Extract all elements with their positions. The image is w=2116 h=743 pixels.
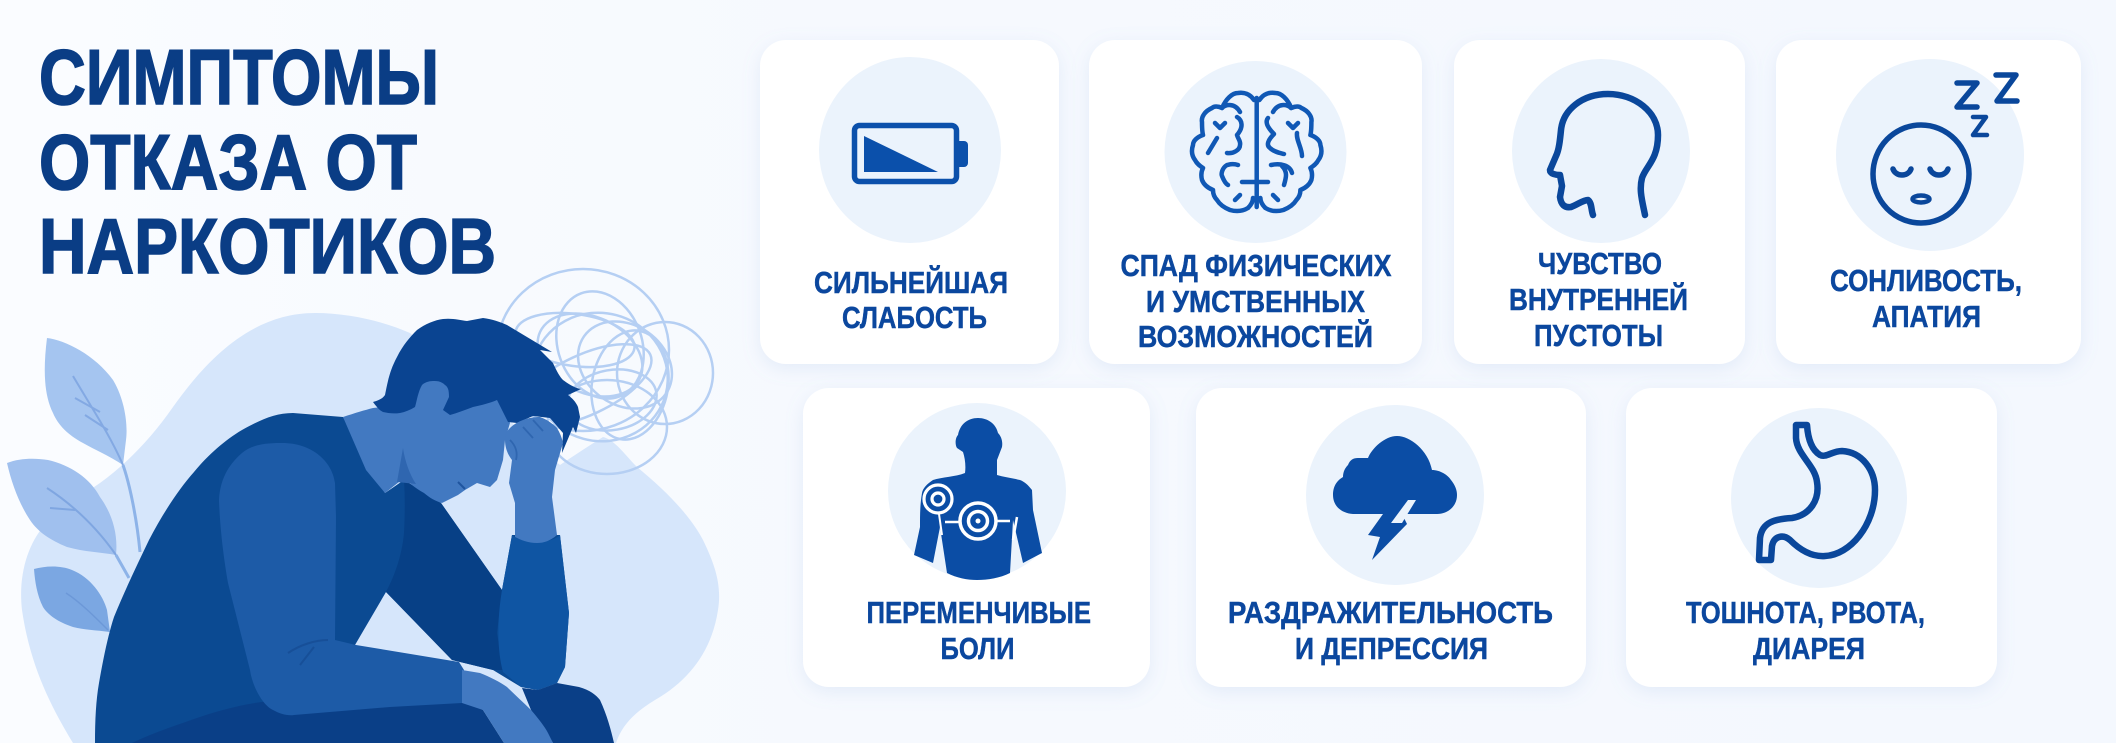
label: СПАД ФИЗИЧЕСКИХ (1120, 248, 1392, 283)
label: ТОШНОТА, РВОТА, (1686, 595, 1925, 630)
pain target: chest (945, 503, 1017, 540)
icon: empty head profile (1550, 94, 1658, 215)
label: СИЛЬНЕЙШАЯ (814, 264, 1008, 300)
title: НАРКОТИКОВ (39, 202, 496, 290)
label: СЛАБОСТЬ (842, 300, 987, 335)
label (1120, 248, 1392, 354)
man: far upper arm shade (386, 480, 503, 670)
illustration: sad man with tangled thoughts (7, 269, 719, 743)
label (1228, 595, 1553, 666)
panel: drowsiness, apathy (1776, 40, 2081, 364)
icon: storm cloud (1333, 436, 1457, 560)
man: torso and raised arm (95, 413, 569, 743)
icon circle (1731, 408, 1907, 588)
panel: physical and mental decline (1089, 40, 1422, 364)
label (1686, 595, 1925, 666)
icon: body with pain targets (914, 418, 1042, 580)
man: neck and face (343, 375, 510, 503)
pain target: shoulder (924, 485, 952, 535)
panel: nausea, vomiting, diarrhea (1626, 388, 1997, 687)
label (866, 595, 1091, 666)
man: mouth (458, 482, 465, 489)
leaf 2 (7, 459, 116, 555)
plant stem (116, 465, 140, 578)
man: sleeve creases (288, 640, 328, 665)
label: СОНЛИВОСТЬ, (1830, 263, 2022, 298)
leaf 1 (45, 338, 127, 465)
man: pants (132, 683, 614, 743)
title (39, 33, 496, 290)
icon: stomach (1759, 425, 1875, 560)
label: И ДЕПРЕССИЯ (1295, 631, 1488, 666)
man: hair (373, 318, 581, 453)
label: И УМСТВЕННЫХ (1146, 284, 1365, 319)
icon: low battery (854, 126, 968, 182)
icon: brain (1192, 93, 1321, 211)
label: БОЛИ (940, 631, 1014, 666)
icon circle (888, 403, 1066, 579)
man: near sleeve (219, 443, 464, 715)
label: АПАТИЯ (1872, 299, 1981, 334)
label (1830, 263, 2022, 334)
icon circle (1512, 59, 1690, 243)
man: raised forearm sleeve (498, 535, 569, 690)
label: ДИАРЕЯ (1753, 631, 1865, 666)
leaf 3 (34, 566, 110, 632)
title: ОТКАЗА ОТ (39, 118, 417, 206)
icon circle (1164, 61, 1346, 243)
icon circle (1306, 405, 1484, 585)
icon: sleepy face (1873, 75, 2017, 223)
label: ПУСТОТЫ (1534, 318, 1663, 353)
background blob (21, 313, 719, 743)
label: ВОЗМОЖНОСТЕЙ (1138, 318, 1373, 354)
icon circle (1836, 59, 2024, 251)
panel: irritability and depression (1196, 388, 1586, 687)
title: СИМПТОМЫ (39, 33, 439, 121)
man: hand on forehead (505, 417, 563, 543)
icon circle (819, 57, 1001, 243)
label: ПЕРЕМЕНЧИВЫЕ (866, 595, 1091, 630)
label: ЧУВСТВО (1538, 246, 1662, 281)
label: РАЗДРАЖИТЕЛЬНОСТЬ (1228, 595, 1553, 630)
label (1509, 246, 1688, 353)
panel: severe weakness (760, 40, 1059, 364)
man: collar shade (397, 448, 416, 484)
scribble of tangled thoughts (497, 269, 713, 474)
panel: inner emptiness (1454, 40, 1745, 364)
panel: shifting pains (803, 388, 1150, 687)
label: ВНУТРЕННЕЙ (1509, 281, 1688, 317)
label (814, 264, 1008, 335)
man: lowered hand (462, 670, 553, 743)
